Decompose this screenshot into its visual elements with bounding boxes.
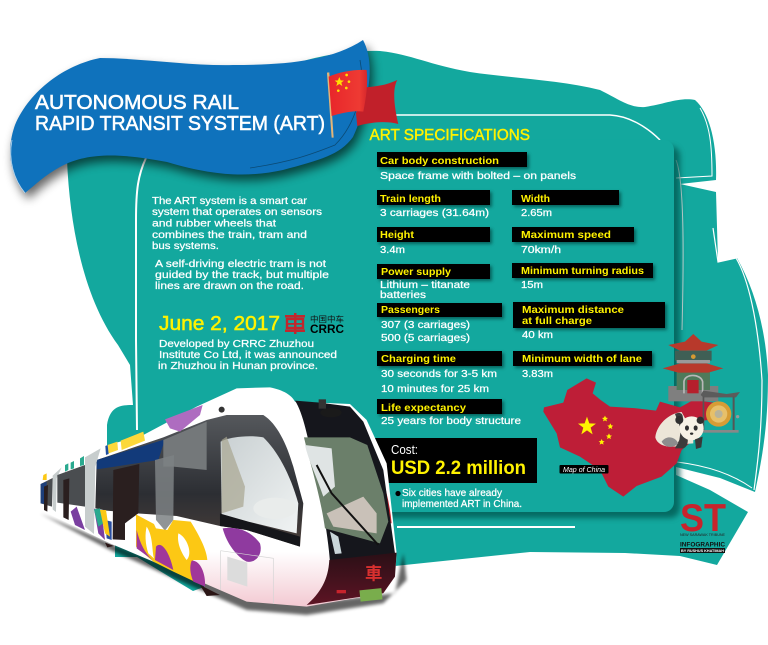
spec: power supply: Power supply (381, 266, 451, 278)
yellow roof stripes (108, 432, 145, 453)
doors (113, 464, 139, 540)
windshield (304, 437, 388, 543)
spec: height (377, 227, 492, 256)
spec: charging time: Charging time (381, 353, 456, 365)
ST logo: ST (680, 497, 726, 540)
ST logo: NEW SARAWAK TRIBUNE (680, 533, 725, 537)
spec: minimum width of lane: Minimum width of lane (522, 353, 642, 365)
cost box: Cost: (391, 442, 418, 457)
spec: car body construction (377, 152, 576, 182)
spec: minimum turning radius: Minimum turning radius (521, 265, 644, 277)
note: six cities (395, 487, 522, 510)
headlight (330, 532, 342, 554)
spec: height: Height (380, 229, 415, 241)
spec: maximum distance (513, 302, 667, 341)
spec: train length (377, 190, 492, 219)
specifications panel (350, 140, 680, 518)
icon: CRRC logo: CRRC (310, 322, 344, 336)
spec: passengers: Passengers (381, 304, 440, 316)
title: AUTONOMOUS RAIL (35, 92, 239, 114)
intro text: system that operates on sensors (152, 206, 322, 218)
spec: width: Width (521, 193, 550, 205)
ST logo: BY RUSHUS KHATIMAH (681, 549, 724, 553)
main side window (95, 415, 303, 547)
articulation bellows (53, 448, 101, 534)
developer text: Institute Co Ltd, it was announced (159, 349, 337, 361)
date: June 2, 2017 (159, 313, 280, 335)
front cab dark (295, 401, 395, 562)
red emblem: 車 (365, 563, 382, 583)
spec: passengers: 307 (3 carriages) (381, 319, 470, 331)
spec: maximum speed: Maximum speed (521, 229, 611, 241)
teal brush background (67, 51, 768, 591)
spec: maximum distance: 40 km (522, 329, 553, 341)
front maroon skirt (307, 553, 397, 605)
note: six cities: Six cities have already (402, 487, 503, 499)
spec: maximum distance: Maximum distance (522, 304, 624, 316)
map label (560, 465, 608, 474)
spec: minimum turning radius: 15m (521, 279, 543, 291)
intro text: lines are drawn on the road. (155, 280, 304, 292)
rear section stripes (65, 456, 84, 472)
spec: life expectancy: 25 years for body structure (381, 415, 521, 427)
intro text: The ART system is a smart car (152, 195, 308, 207)
spec: car body construction: Space frame with bolted – on panels (380, 170, 576, 182)
spec: minimum width of lane (513, 351, 654, 380)
spec: passengers: 500 (5 carriages) (381, 332, 470, 344)
wiper (317, 465, 378, 545)
heading: ART specifications: ART SPECIFICATIONS (370, 127, 530, 144)
spec: car body construction: Car body construction (380, 155, 499, 167)
title: RAPID TRANSIT SYSTEM (ART) (35, 113, 325, 135)
spec: life expectancy (377, 399, 521, 427)
ST logo: INFOGRAPHIC (680, 542, 725, 548)
intro text: and rubber wheels that (152, 218, 276, 230)
icon: CRRC logo: 中国中车 (310, 314, 344, 324)
cost box: USD 2.2 million (391, 458, 526, 479)
intro text (152, 195, 329, 292)
spec: power supply: batteries (380, 289, 426, 301)
green plate (359, 588, 382, 602)
spec: train length: Train length (380, 193, 441, 205)
developer text: in Zhuzhou in Hunan province. (158, 360, 318, 372)
spec: maximum speed: 70km/h (521, 244, 561, 256)
note: six cities: implemented ART in China. (402, 498, 522, 510)
icon: gong (701, 391, 740, 433)
spec: train length: 3 carriages (31.64m) (380, 207, 489, 219)
spec: minimum width of lane: 3.83m (522, 368, 553, 380)
rear windows (41, 465, 85, 507)
intro text: A self-driving electric tram is not (155, 258, 326, 270)
intro text: combines the train, tram and (152, 229, 307, 241)
spec: life expectancy: Life expectancy (381, 402, 466, 414)
banner (10, 40, 373, 199)
intro text: guided by the track, but multiple (155, 269, 329, 281)
spec: power supply (377, 264, 492, 301)
cost box (375, 438, 537, 483)
tram shadow (40, 513, 407, 615)
side vent panel (221, 551, 273, 604)
spec: minimum turning radius (512, 263, 655, 291)
spec: width: 2.65m (521, 207, 552, 219)
tram illustration (40, 387, 407, 615)
icon: flags (327, 70, 398, 138)
map of China (543, 378, 714, 497)
spec: passengers (377, 303, 504, 344)
spec: power supply: Lithium – titanate (380, 279, 470, 291)
spec: maximum speed (512, 227, 636, 256)
red side stripe (367, 445, 391, 523)
icon: pagoda (663, 334, 723, 401)
spec: charging time (377, 351, 504, 395)
spec: height: 3.4m (380, 244, 405, 256)
title (35, 92, 325, 135)
camera (320, 408, 342, 417)
spec: charging time: 10 minutes for 25 km (381, 383, 489, 395)
map label: Map of China (563, 467, 605, 474)
wheel (105, 543, 220, 596)
developer text (158, 338, 337, 372)
intro text: bus systems. (152, 240, 219, 252)
icon: CRRC logo (285, 313, 344, 336)
yellow graphics (136, 514, 207, 583)
developer text: Developed by CRRC Zhuzhou (159, 338, 314, 350)
rear side graphics (71, 507, 105, 540)
icon: panda (655, 412, 704, 449)
spec: width (512, 190, 621, 219)
spec: maximum distance: at full charge (522, 315, 592, 327)
tram body (40, 387, 397, 607)
spec: charging time: 30 seconds for 3-5 km (381, 368, 497, 380)
